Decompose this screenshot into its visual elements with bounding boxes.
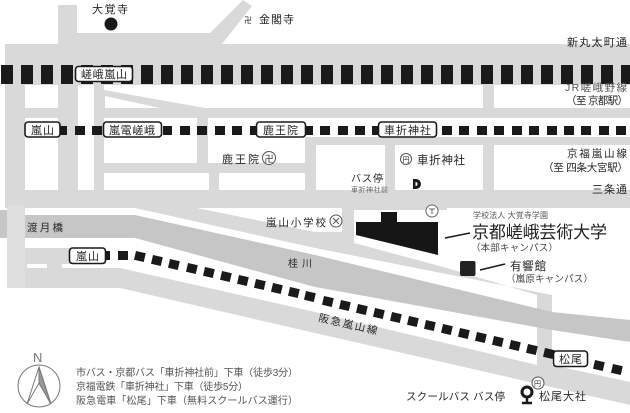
line label: 京福嵐山線	[543, 147, 628, 174]
building: main campus	[356, 212, 438, 255]
station sign: 嵐電嵯峨: 嵐電嵯峨	[109, 123, 155, 137]
label: 嵐山小学校: 嵐山小学校	[266, 216, 326, 229]
landmark: 松尾大社: 松尾大社	[539, 389, 586, 403]
landmark: 大覚寺: 大覚寺	[92, 2, 128, 16]
access directions: 市バス・京都バス「車折神社前」下車（徒歩3分）	[76, 366, 298, 379]
heading: university name: 京都嵯峨芸術大学	[472, 223, 607, 242]
label: 阪急嵐山線: 阪急嵐山線	[317, 311, 379, 338]
bus stop: スクールバス	[406, 387, 532, 403]
landmark: 松尾大社: 円	[534, 380, 541, 388]
bus stop: 車折神社前	[351, 172, 421, 194]
leader line: 有響館	[480, 264, 505, 270]
Hankyu Arashiyama line track	[105, 251, 623, 375]
heading: university name: （本部キャンパス）	[471, 242, 558, 254]
label: 嵐山小学校	[266, 215, 342, 229]
landmark: 金閣寺: 金閣寺	[259, 13, 294, 26]
landmark: 鹿王院 temple	[222, 152, 276, 166]
station sign: 松尾	[554, 351, 588, 366]
compass: north arrow: N	[33, 350, 42, 365]
station sign: 鹿王院	[256, 122, 306, 137]
landmark: 鹿王院 temple: 卍	[264, 154, 274, 164]
river: Katsuragawa	[0, 210, 630, 342]
station sign: 嵐山 (Randen)	[25, 122, 60, 137]
vertical bridge road	[7, 205, 25, 288]
heading: university name: 学校法人 大覚寺学園	[473, 210, 548, 220]
post office mark	[426, 205, 438, 217]
landmark: 大覚寺	[92, 2, 128, 30]
Keifuku Randen line track	[57, 126, 626, 135]
station sign: 鹿王院: 鹿王院	[263, 123, 298, 137]
bus stop: 車折神社前: 車折神社前	[351, 185, 388, 194]
building: 有響館	[460, 261, 476, 276]
city blocks	[25, 85, 630, 268]
landmark: 松尾大社	[532, 377, 586, 403]
bus stop: 車折神社前: バス停	[351, 172, 383, 185]
line label: 京福嵐山線: （至 四条大宮駅）	[543, 161, 628, 174]
line label: JR嵯峨野線: JR嵯峨野線	[565, 81, 628, 94]
label: 有響館: 有響館	[510, 259, 546, 273]
station sign: 嵯峨嵐山: 嵯峨嵐山	[81, 67, 127, 81]
leader line: main campus	[445, 233, 470, 238]
line label: JR嵯峨野線	[565, 81, 628, 107]
station sign: 車折神社: 車折神社	[384, 123, 431, 137]
landmark: 車折神社 shrine	[400, 153, 466, 167]
label: 有響館: （嵐原キャンパス）	[506, 273, 593, 285]
station sign: 嵐山 (Randen): 嵐山	[31, 124, 54, 137]
access directions: 京福電鉄「車折神社」下車（徒歩5分）	[76, 380, 248, 393]
road label: 三条通: 三条通	[592, 182, 627, 196]
station sign: 嵐山 (Hankyu)	[70, 248, 106, 264]
JR Sagano line track	[1, 65, 630, 84]
station sign: 車折神社	[378, 122, 436, 137]
access directions	[76, 366, 298, 407]
compass: north arrow	[18, 350, 60, 407]
landmark: 車折神社 shrine: 車折神社	[417, 153, 466, 167]
station sign: 嵯峨嵐山	[76, 66, 132, 82]
access directions: 阪急電車「松尾」下車（無料スクールバス運行）	[76, 394, 298, 407]
station sign: 嵐電嵯峨	[104, 122, 162, 137]
bus stop: スクールバス: スクールバス バス停	[406, 390, 506, 403]
heading: university name	[471, 210, 607, 254]
line label: 京福嵐山線: 京福嵐山線	[567, 147, 628, 160]
label: 渡月橋: 渡月橋	[27, 221, 64, 234]
landmark: 車折神社 shrine: 円	[402, 156, 410, 164]
landmark: 金閣寺	[244, 13, 294, 26]
line label: JR嵯峨野線: （至 京都駅）	[566, 95, 628, 107]
road label: 新丸太町通: 新丸太町通	[567, 36, 627, 49]
station sign: 松尾: 松尾	[559, 352, 582, 366]
label: 有響館	[506, 259, 593, 285]
landmark: 金閣寺: 卍	[244, 16, 252, 25]
landmark: 鹿王院 temple: 鹿王院	[222, 152, 259, 166]
station sign: 嵐山 (Hankyu): 嵐山	[76, 250, 99, 263]
label: 桂川: 桂川	[288, 257, 312, 270]
